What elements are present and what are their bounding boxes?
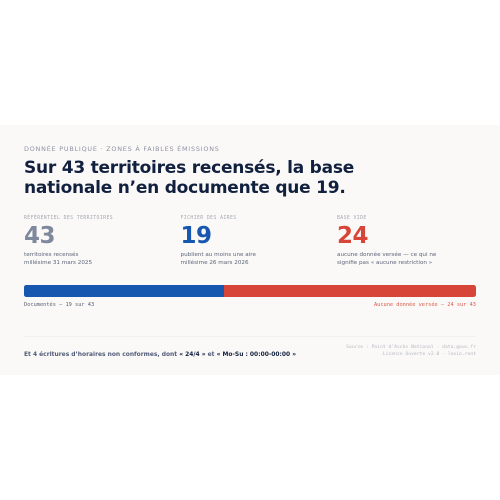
stat number: 19 <box>180 223 212 249</box>
progress bar <box>24 284 476 296</box>
source credits: Source : Point d’Accès National - data.gouv.fr <box>346 345 476 350</box>
stat: territories <box>24 214 113 266</box>
stat: empty base <box>337 215 436 266</box>
stat description <box>337 252 436 266</box>
stat description: millésime 31 mars 2025 <box>24 260 92 266</box>
eyebrow heading: DONNÉE PUBLIQUE · ZONES À FAIBLES ÉMISSIONS <box>24 145 220 153</box>
bar label: no data: Aucune donnée versée — 24 sur 43 <box>374 302 476 308</box>
footnote: Et 4 écritures d’horaires non conformes, dont « 24/4 » et « Mo-Su : 00:00-00:00 » <box>24 351 296 358</box>
stat description: millésime 26 mars 2026 <box>180 260 249 266</box>
title: nationale n’en documente que 19. <box>24 178 346 198</box>
stat description: publient au moins une aire <box>180 252 256 258</box>
title: Sur 43 territoires recensés, la base <box>24 158 354 178</box>
bar label: documented: Documentés — 19 sur 43 <box>24 302 94 308</box>
stat description <box>24 252 92 266</box>
bar segment: documented <box>24 284 224 296</box>
stat label: RÉFÉRENTIEL DES TERRITOIRES <box>24 216 113 221</box>
stat label: FICHIER DES AIRES <box>180 216 237 221</box>
source credits: Licence Ouverte v2.0 - lexio.rent <box>383 352 476 357</box>
stat: file <box>180 215 256 266</box>
stat description: aucune donnée versée — ce qui ne <box>337 252 436 258</box>
title <box>24 158 354 198</box>
stat number: 24 <box>337 223 368 249</box>
stat description: signifie pas « aucune restriction » <box>337 260 432 266</box>
stat description: territoires recensés <box>24 252 78 258</box>
panel: background card <box>0 125 500 375</box>
stat number: 43 <box>24 223 55 249</box>
stat description <box>180 252 256 266</box>
source credits <box>346 344 476 357</box>
stat label: BASE VIDE <box>337 216 367 221</box>
